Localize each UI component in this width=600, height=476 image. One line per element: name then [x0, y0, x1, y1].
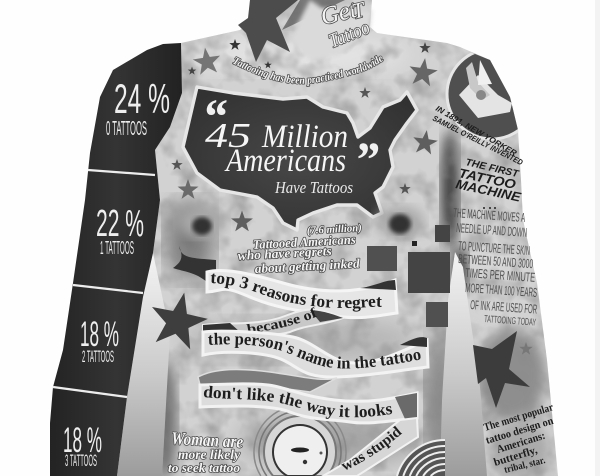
neck script: Get Tattoo: Tattoo: [326, 17, 373, 53]
headline: 45 Million Americans: Americans: [224, 143, 346, 179]
text: history of the tattoo machine: IN 1891, NEW YORKER: [434, 104, 518, 158]
text: how the machine works: [453, 205, 538, 329]
shoulder emblem: [446, 52, 518, 140]
neck script: Get Tattoo: [318, 0, 373, 53]
text: 2 TATTOOS: [82, 347, 114, 366]
regret statistic text: (7.6 million): [307, 222, 362, 237]
sub-headline: Have Tattoos: Have Tattoos: [274, 178, 353, 197]
text: history of the tattoo machine: MACHINE: [454, 176, 522, 205]
text: history of the tattoo machine: TATTOO: [457, 165, 517, 192]
stat: 18% 2 tattoos: [80, 315, 119, 366]
text: most popular tattoo design: [482, 401, 555, 476]
right edge strip: [595, 0, 600, 476]
text: history of the tattoo machine: [431, 104, 524, 205]
arm star: [473, 331, 533, 408]
text: history of the tattoo machine: SAMUEL O'REILLY INVENTED: [431, 114, 524, 167]
navel: [254, 406, 346, 476]
text: most popular tattoo design: tribal, star.: [503, 455, 547, 476]
stat: 22% 1 tattoos: [96, 203, 144, 258]
text: most popular tattoo design: The most popular: [482, 401, 555, 434]
stat: 24% 0 tattoos: 24 %: [114, 75, 170, 122]
text: 18 %: [63, 421, 102, 460]
gap between torso and right arm: [438, 250, 488, 476]
stat: 24% 0 tattoos: [106, 75, 170, 140]
text: history of the tattoo machine: THE FIRST: [464, 157, 520, 180]
text: how the machine works: TIMES PER MINUTE: [465, 265, 536, 285]
arm dividers: [53, 170, 155, 397]
ribbon back behind third banner: [198, 369, 337, 392]
left arm: [50, 43, 182, 476]
ribbon: the person's name in the tattoo: the person's name in the tattoo: [208, 332, 421, 368]
text: 18 %: [80, 315, 119, 354]
text: how the machine works: BETWEEN 50 AND 3000: [458, 251, 534, 271]
US map: [183, 87, 417, 230]
ribbon: was stupid: [321, 417, 419, 476]
banner text: Tattooing has been practiced worldwide: Tattooing has been practiced worldwide: [232, 55, 384, 87]
lower-right belly stripes: [397, 440, 445, 476]
text: how the machine works: TATTOOING TODAY: [484, 314, 537, 329]
headline: 45 Million Americans: 45: [205, 116, 251, 155]
closing quote: ”: [354, 131, 379, 187]
ribbon back: because of: [202, 307, 344, 334]
ribbon back: because of: because of: [246, 307, 317, 332]
ribbon: top 3 reasons for regret: top 3 reasons for regret: [210, 274, 382, 312]
neck tattoo star: [238, 0, 372, 62]
text: most popular tattoo design: butterfly,: [492, 444, 539, 469]
gap between left arm and torso: [117, 253, 172, 476]
chest shading: nipples: [178, 206, 424, 238]
text: most popular tattoo design: tattoo design on: [484, 415, 555, 447]
stat: 18% 3 tattoos: [63, 421, 102, 470]
headline: 45 Million Americans: [205, 116, 348, 179]
stat: 22% 1 tattoos: 22 %: [96, 203, 144, 245]
regret statistic text: about getting inked: [254, 255, 361, 276]
text: Woman are more likely to seek tattoo: Woman are: [171, 428, 244, 452]
dark squares: [367, 225, 450, 327]
torso and right arm: [150, 0, 560, 476]
stat: 24% 0 tattoos: 0 TATTOOS: [106, 118, 147, 140]
regret statistic text: who have regrets: [237, 243, 332, 263]
icon: bird on paper: [459, 60, 512, 118]
text: most popular tattoo design: Americans:: [495, 430, 547, 456]
regret statistic text: Tattooed Americans: [252, 232, 356, 252]
regret statistic text: [237, 222, 362, 276]
text: 3 TATTOOS: [65, 451, 97, 470]
text: Woman are more likely to seek tattoo: to seek tattoo: [168, 460, 241, 475]
ribbon back: top tail: [173, 246, 216, 282]
ribbon: don't like the way it looks: don't like the way it looks: [204, 386, 392, 419]
ribbon: was stupid: was stupid: [341, 426, 402, 470]
stars on chest: [145, 39, 439, 352]
text: 1 TATTOOS: [100, 238, 134, 258]
text: Woman are more likely to seek tattoo: [168, 428, 244, 475]
text: Woman are more likely to seek tattoo: more likely: [178, 448, 241, 463]
headline: 45 Million Americans: Million: [261, 119, 348, 155]
three dots: [483, 207, 496, 209]
quote marks: “: [202, 88, 227, 144]
